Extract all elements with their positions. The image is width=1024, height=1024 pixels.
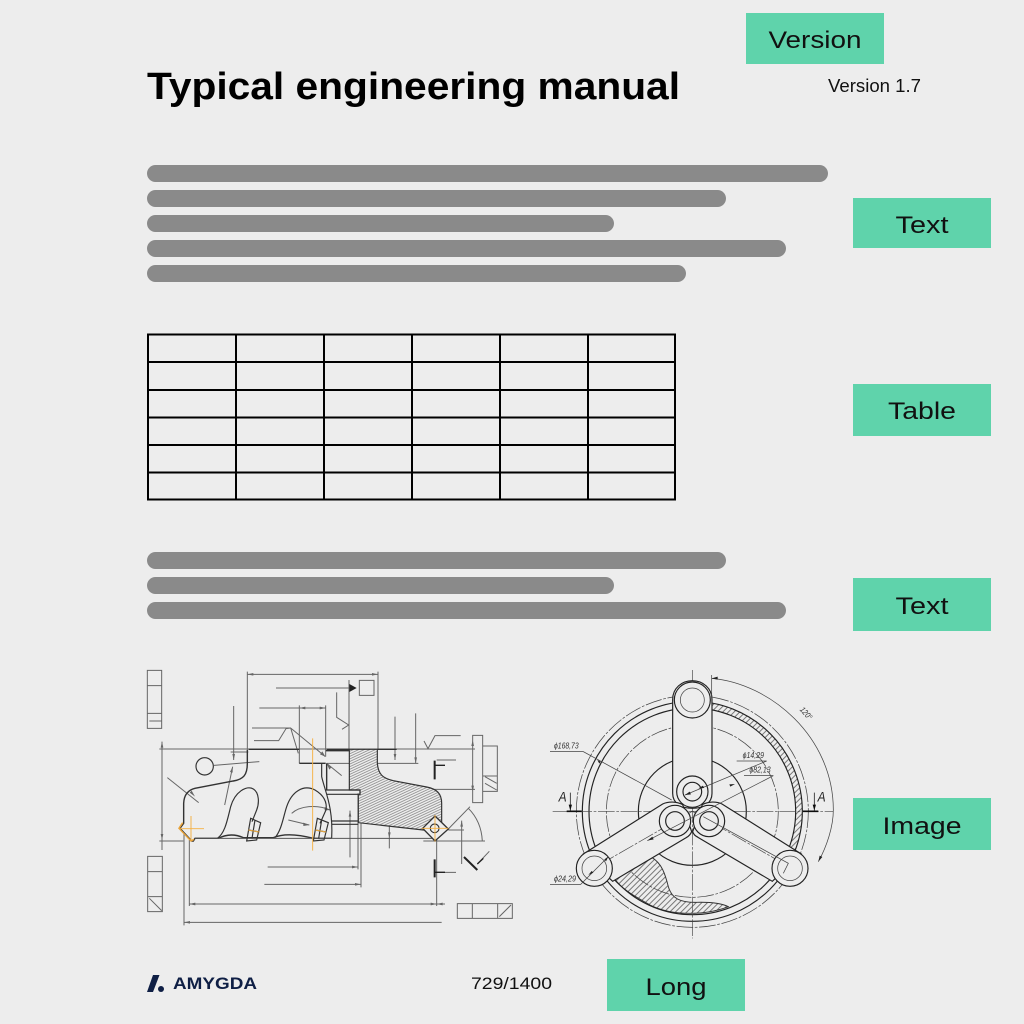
- drawing labels: A: [558, 789, 567, 805]
- image label tag: Image: [882, 813, 962, 840]
- section marks A: [567, 809, 818, 814]
- version label tag: [746, 13, 884, 64]
- drawing labels: A: [817, 789, 826, 805]
- drawing labels: ϕ24,29: [554, 873, 576, 883]
- drawing labels: ϕ14,29: [743, 750, 764, 760]
- long label tag: Long: [646, 974, 706, 1001]
- cutter body outline: [180, 750, 332, 841]
- text label tag: [853, 578, 991, 631]
- drawing labels: 120°: [798, 705, 815, 722]
- drawing labels: ϕ82,13: [749, 765, 771, 775]
- outer rings: [576, 695, 808, 927]
- text label tag: Text: [896, 593, 949, 620]
- drawing labels: [554, 705, 826, 883]
- image label tag: [853, 798, 991, 850]
- insert clamps: [247, 818, 261, 841]
- logo: Amygda: AMYGDA: [173, 974, 257, 993]
- image: cutter cross-section drawing: [147, 670, 512, 925]
- centre lines: [553, 670, 833, 938]
- text label tag: Text: [896, 212, 949, 239]
- version number: Version 1.7: [828, 76, 921, 96]
- page number: 729/1400: [471, 974, 552, 993]
- hub circles: [677, 776, 708, 807]
- square insert: [423, 816, 448, 841]
- second text block placeholder: [147, 552, 786, 619]
- table label tag: [853, 384, 991, 436]
- orange centre lines: [180, 738, 448, 851]
- hatched lower web: [614, 857, 728, 913]
- table label tag: Table: [888, 398, 956, 425]
- first text block placeholder: [147, 165, 828, 282]
- arms: [673, 681, 712, 808]
- table: [148, 334, 675, 500]
- drawing labels: ϕ168,73: [554, 741, 579, 751]
- dimension leaders: [550, 675, 833, 884]
- image: three arm wheel drawing: [550, 670, 833, 938]
- title: Typical engineering manual: [147, 66, 680, 108]
- circle detail: [196, 758, 213, 775]
- hatched rim: [712, 703, 802, 850]
- black marker arrow: [349, 684, 357, 692]
- long label tag: [607, 959, 745, 1011]
- version label tag: Version: [768, 27, 862, 54]
- logo: Amygda: [147, 974, 257, 993]
- text label tag: [853, 198, 991, 248]
- hatched section: [349, 749, 442, 830]
